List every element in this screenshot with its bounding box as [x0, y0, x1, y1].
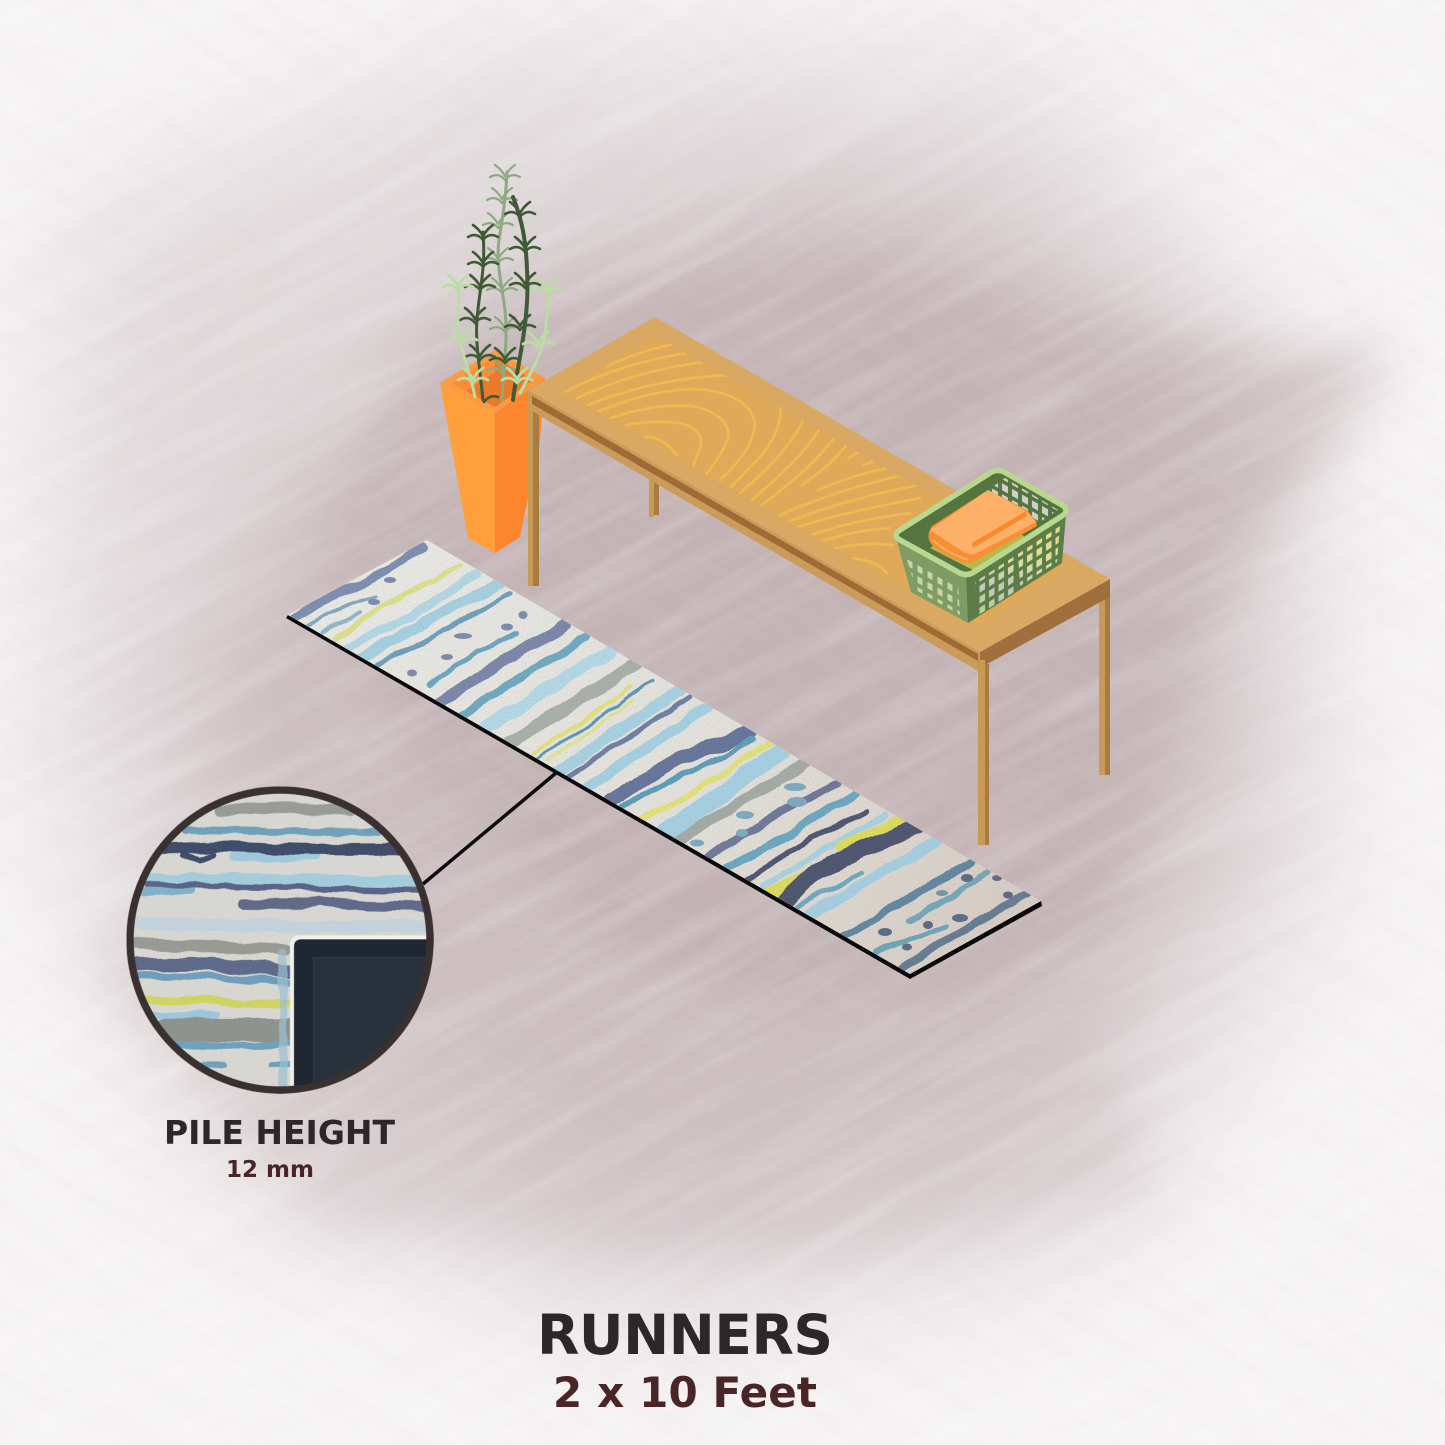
basket back and inside [896, 470, 1066, 574]
basket rim [896, 470, 1066, 574]
plant in orange pot [440, 165, 562, 553]
right rug stripes [640, 743, 1028, 970]
basket left face [896, 538, 968, 623]
table top with wood grain [528, 317, 1110, 652]
pile stripes [135, 807, 427, 1090]
table left leg [528, 392, 539, 586]
size line: 2 x 10 Feet [553, 1368, 817, 1417]
pile height value: 12 mm [226, 1157, 314, 1183]
pile height heading: PILE HEIGHT [164, 1113, 395, 1152]
striped runner rug [280, 530, 1050, 980]
label: pile height [164, 1113, 395, 1183]
table front leg [978, 660, 989, 845]
basket right face [966, 514, 1066, 623]
table right leg [1099, 590, 1110, 775]
title heading: RUNNERS [537, 1303, 833, 1367]
folded towels [928, 490, 1037, 570]
zoom circle: rug pile detail [127, 787, 433, 1094]
table [528, 317, 1110, 845]
connector line from rug to zoom circle [423, 773, 556, 884]
plant stems and leaves [443, 165, 562, 402]
table back leg [649, 470, 659, 517]
title: product type and size [537, 1303, 833, 1417]
rug dots [368, 577, 1013, 950]
laundry basket with towels [896, 470, 1070, 630]
table apron [528, 390, 1110, 672]
folded-back corner: dark backing [290, 935, 433, 1094]
rug edge shadow [286, 615, 1042, 979]
pot [440, 350, 545, 553]
left rug stripes [293, 547, 753, 806]
